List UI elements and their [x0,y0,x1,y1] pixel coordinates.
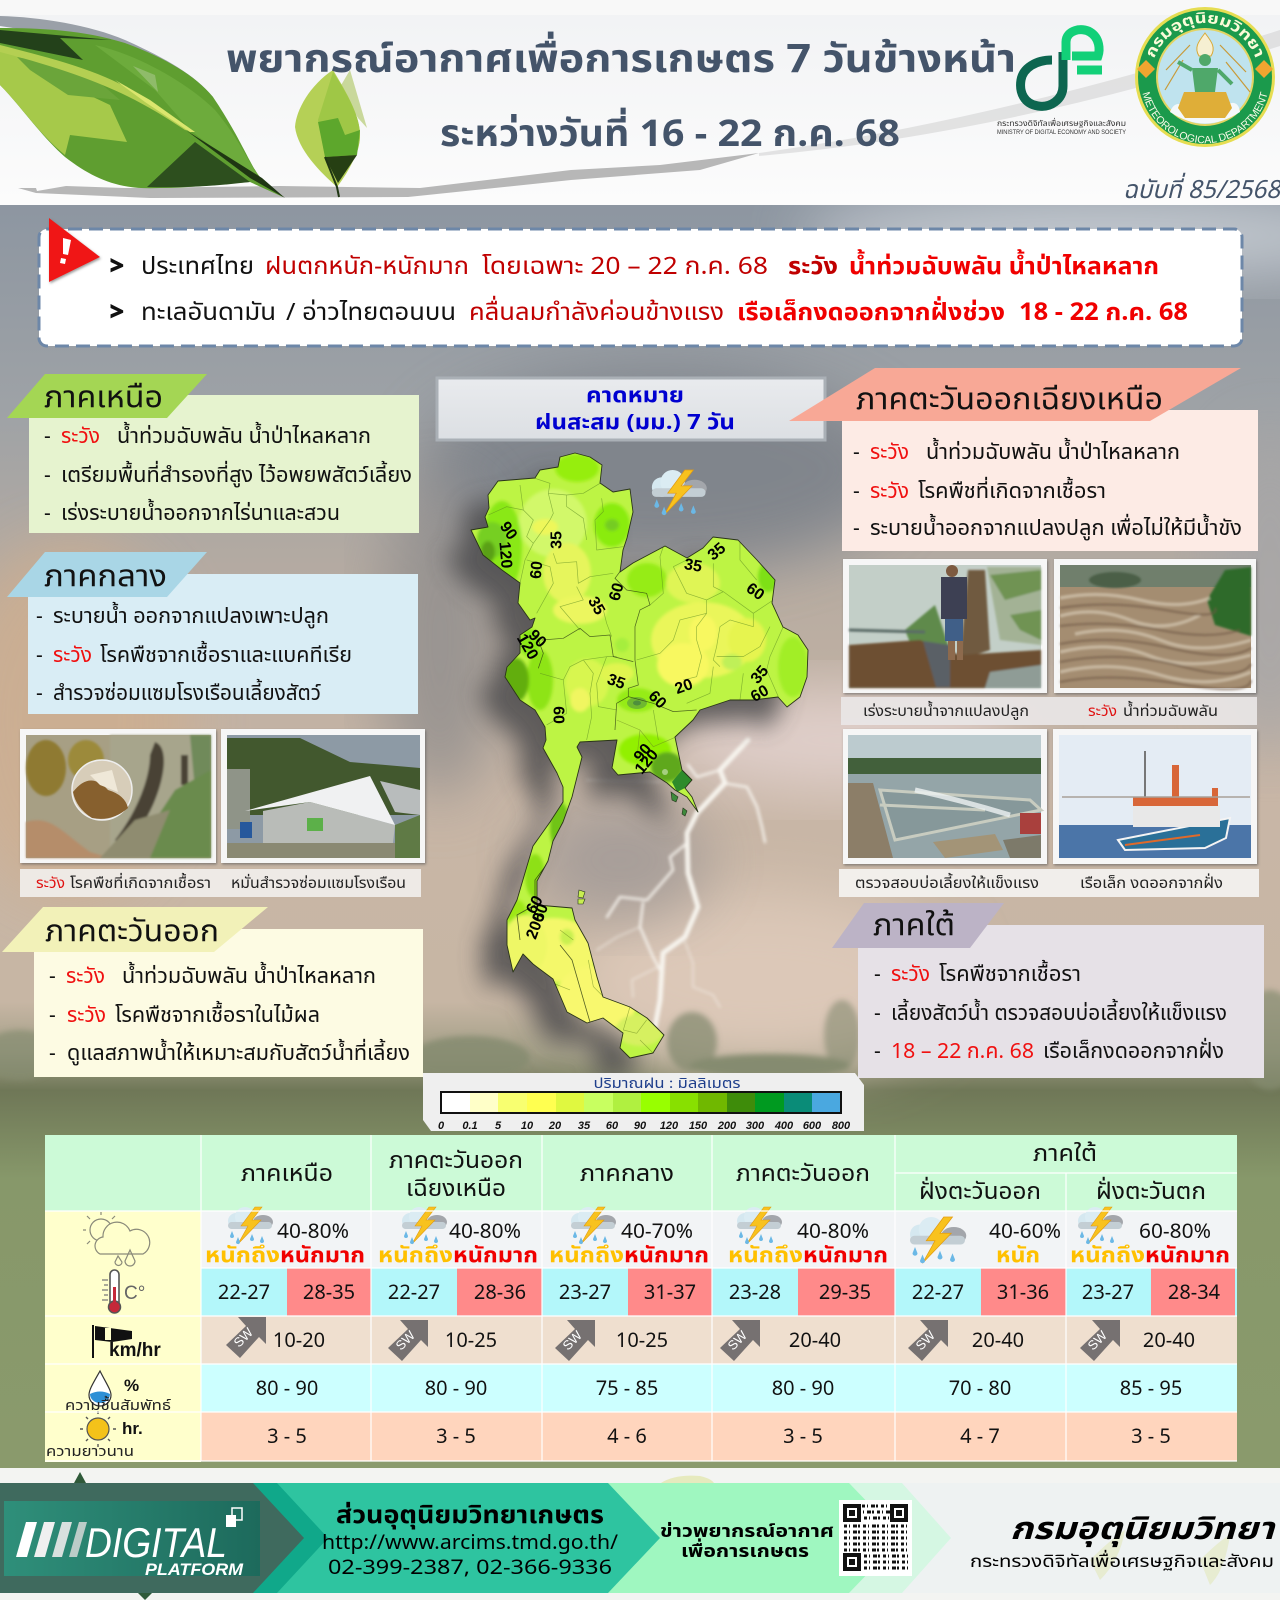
logo: ministry of digital economy: MINISTRY OF DIGITAL ECONOMY AND SOCIETY [997,130,1126,136]
wind row [201,1316,1237,1364]
alert line 2: 18 - 22 ก.ค. 68 [1019,295,1188,331]
header band [0,0,1280,210]
icon: sunshine duration: hr. [122,1419,143,1438]
rainfall contour labels: 60 [550,706,566,724]
caption band: central photos [20,869,421,897]
caption band: central photos: โรคพืชที่เกิดจากเชื้อรา [70,872,211,895]
caption band: central photos: ระวัง [36,872,65,895]
rainfall contour labels: 60 [743,580,767,604]
rainfall contour labels: 90 [631,741,655,765]
wind row: 20-40 [972,1326,1024,1356]
rain probability row: หนักถึง [378,1241,453,1272]
icon: sunshine duration [46,1411,143,1463]
rain probability row: 40-60% [989,1217,1061,1247]
province borders [488,478,783,740]
rainfall contour labels [495,519,772,941]
temperature row [201,1268,1237,1316]
rainfall contour labels: 60 [523,893,547,917]
alert line 1: โดยเฉพาะ 20 – 22 ก.ค. 68 [482,249,768,285]
alert line 1: ฝนตกหนัก-หนักมาก [265,249,469,285]
table header row: ฝั่งตะวันออก [919,1176,1041,1210]
photo: farmer draining field [843,559,1047,693]
logo: ministry of digital economy [997,30,1126,136]
central advice list: ระบายน้ำ ออกจากแปลงเพาะปลูก [53,601,329,633]
temperature row: 28-34 [1168,1278,1221,1308]
east advice list: ระวัง [67,1001,106,1032]
table header row: ภาคตะวันออก [389,1145,523,1179]
legend scale labels: 5 [495,1120,502,1132]
contact: agrometeorological division: http://www.arcims.tmd.go.th/ [322,1528,619,1558]
sunshine duration row: 3 - 5 [267,1422,307,1452]
central advice list: - [36,641,43,672]
map title box: คาดหมาย [586,381,684,412]
northeast advice list: - [853,477,860,508]
temperature row: 28-35 [303,1278,355,1308]
central advice list: - [36,679,43,710]
rain probability row: หนักมาก [453,1241,538,1272]
relative humidity row: 80 - 90 [425,1374,487,1404]
temperature row: 22-27 [912,1278,964,1308]
logo: meteorological department seal [1135,7,1275,147]
north advice list: - [44,461,51,492]
digital platform logo: PLATFORM [145,1560,244,1579]
central advice list [36,601,352,710]
temperature row: 23-28 [729,1278,781,1308]
contact: agrometeorological division [322,1497,619,1583]
temperature row: 23-27 [559,1278,611,1308]
rain probability row: หนัก [996,1241,1040,1272]
north advice list: เร่งระบายน้ำออกจากไร่นาและสวน [61,498,340,530]
icon: humidity: ความชื้นสัมพัทธ์ [65,1395,171,1417]
wind row: 10-20 [273,1326,325,1356]
rainfall contour labels: 35 [748,663,772,687]
east advice list: ดูแลสภาพน้ำให้เหมาะสมกับสัตว์น้ำที่เลี้ยง [67,1038,410,1070]
legend scale labels: 150 [689,1120,708,1132]
department name: กรมอุตุนิยมวิทยา [1010,1506,1276,1553]
panel: central region [7,552,418,714]
table header row: ภาคเหนือ [241,1158,333,1192]
title: พยากรณ์อากาศเพื่อการเกษตร 7 วันข้างหน้า [226,31,1016,90]
icon: thermometer [102,1270,145,1313]
east advice list: น้ำท่วมฉับพลัน น้ำป่าไหลหลาก [122,961,376,993]
panel: east region [2,907,423,1077]
rainfall contour labels: 60 [748,682,772,706]
rainfall contour labels: 90 [496,519,520,543]
photo: durian fungal disease [20,729,216,863]
east advice list [49,961,410,1070]
relative humidity row: 75 - 85 [596,1374,658,1404]
table header row: ภาคตะวันออก [736,1158,870,1192]
rainfall contour labels: 35 [705,540,729,564]
south advice list: - [874,960,881,991]
rain probability row: หนักมาก [803,1241,888,1272]
legend colour bar [441,1092,841,1113]
rainfall contour labels: 60 [528,560,546,580]
central advice list: - [36,602,43,633]
caption band: central photos: หมั่นสำรวจซ่อมแซมโรงเรือน [231,872,406,895]
photo: poultry house [221,729,425,863]
icon: small leaf [295,70,367,197]
logo: meteorological department seal: กรมอุตุนิยมวิทยา [1148,12,1262,58]
rainfall contour labels: 90 [525,627,549,651]
east advice list: โรคพืชจากเชื้อราในไม้ผล [115,1000,320,1032]
rainfall contour labels: 120 [632,746,662,778]
legend scale labels [438,1120,851,1132]
rain probability row: 40-70% [621,1217,693,1247]
rain probability row: หนักถึง [549,1241,624,1272]
heading: east [2,907,268,955]
icon: weather outline [83,1212,150,1266]
north advice list: ระวัง [61,422,100,453]
northeast advice list: - [853,514,860,545]
icon: humidity [65,1371,171,1417]
icon: sunshine duration: ความยาวนาน [46,1442,134,1463]
footer band [0,1468,1280,1600]
south advice list: ระวัง [891,960,930,991]
caption band: northeast photos: น้ำท่วมฉับพลัน [1123,700,1218,723]
relative humidity row: 80 - 90 [256,1374,318,1404]
rainfall contour labels: 120 [495,541,515,569]
heading: north: ภาคเหนือ [44,375,163,421]
northeast advice list: โรคพืชที่เกิดจากเชื้อรา [918,476,1106,508]
icon: humidity: % [124,1376,139,1395]
south advice list: เรือเล็กงดออกจากฝั่ง [1043,1037,1224,1068]
east advice list: - [49,1039,56,1070]
icon: storm cloud [652,470,707,515]
legend scale labels: 60 [606,1120,619,1132]
wind row: 20-40 [789,1326,841,1356]
legend scale labels: 300 [746,1120,765,1132]
legend scale labels: 120 [660,1120,679,1132]
heading: northeast: ภาคตะวันออกเฉียงเหนือ [856,377,1163,423]
central advice list: ระวัง [53,641,92,672]
wind row: 20-40 [1143,1326,1195,1356]
panel: south region [832,903,1264,1078]
central advice list: โรคพืชจากเชื้อราและแบคทีเรีย [100,640,352,672]
temperature row: 28-36 [474,1278,526,1308]
relative humidity row: 70 - 80 [949,1374,1011,1404]
alert line 2: > [110,295,124,331]
rainfall contour labels: 35 [605,671,627,693]
icon: thermometer: C° [124,1283,145,1304]
northeast advice list [853,437,1242,545]
legend scale labels: 800 [832,1120,851,1132]
south advice list: เลี้ยงสัตว์น้ำ ตรวจสอบบ่อเลี้ยงให้แข็งแรง [891,998,1227,1030]
rain probability row [201,1207,1237,1272]
sunshine duration row: 3 - 5 [1131,1422,1171,1452]
forecast table [45,1135,1237,1463]
wind row: 10-25 [445,1326,497,1356]
alert panel [39,218,1242,346]
QR caption [660,1519,834,1566]
contact: agrometeorological division: 02-399-2387, 02-366-9336 [328,1553,612,1583]
rainfall contour labels: 60 [606,581,628,603]
logo: ministry of digital economy: กระทรวงดิจิทัลเพื่อเศรษฐกิจและสังคม [997,117,1126,130]
alert line 2: เรือเล็กงดออกจากฝั่งช่วง [737,295,1005,331]
rainfall colour legend: ปริมาณฝน : มิลลิเมตร [594,1074,741,1095]
table header row: เฉียงเหนือ [406,1173,506,1207]
south advice list: - [874,999,881,1030]
south advice list: 18 – 22 ก.ค. 68 [891,1037,1034,1068]
northeast advice list: - [853,438,860,469]
legend scale labels: 400 [774,1120,794,1132]
legend scale labels: 600 [803,1120,822,1132]
table header row: ภาคใต้ [1033,1138,1097,1172]
legend scale labels: 90 [634,1120,647,1132]
map title box: ฝนสะสม (มม.) 7 วัน [535,408,735,439]
northeast advice list: น้ำท่วมฉับพลัน น้ำป่าไหลหลาก [926,437,1180,469]
caption band: northeast photos [841,697,1257,725]
map title box [437,378,825,440]
table header row: ภาคกลาง [580,1158,674,1192]
rainfall contour labels: 20 [673,676,695,698]
east advice list: - [49,1001,56,1032]
rain probability row: 40-80% [277,1217,349,1247]
rainfall contour labels: 120 [513,631,541,663]
temperature row: 29-35 [819,1278,871,1308]
rain probability row: หนักมาก [280,1241,365,1272]
alert line 1: ประเทศไทย [141,249,254,285]
icon: windsock km/hr: km/hr [109,1340,161,1361]
panel: north region [7,374,419,533]
alert line 2: คลื่นลมกำลังค่อนข้างแรง [469,295,724,331]
legend scale labels: 20 [548,1120,562,1132]
caption band: northeast photos: ระวัง [1088,700,1117,723]
legend scale labels: 0 [438,1120,445,1132]
heading: south: ภาคใต้ [873,903,955,949]
temperature row: 22-27 [218,1278,270,1308]
subtitle: date range: ระหว่างวันที่ 16 - 22 ก.ค. 68 [440,107,900,163]
northeast advice list: ระวัง [870,438,909,469]
sunshine duration row: 3 - 5 [436,1422,476,1452]
alert line 2 [110,295,1188,331]
legend scale labels: 200 [717,1120,737,1132]
relative humidity row [201,1364,1237,1412]
temperature row: 31-36 [997,1278,1049,1308]
trees on the horizon [0,990,1280,1090]
table header row [45,1135,1237,1211]
legend scale labels: 10 [521,1120,534,1132]
alert line 1: น้ำท่วมฉับพลัน น้ำป่าไหลหลาก [849,249,1159,285]
relative humidity row: 80 - 90 [772,1374,834,1404]
heading: northeast [789,368,1241,423]
rainfall contour labels: 50 [530,902,552,924]
north advice list: น้ำท่วมฉับพลัน น้ำป่าไหลหลาก [117,421,371,453]
icon: big leaf [0,16,285,198]
map: Thailand 7-day accumulated rainfall [446,440,820,1080]
heading: central: ภาคกลาง [44,554,167,600]
sunshine duration row: 4 - 6 [607,1422,647,1452]
rainfall contour labels: 35 [683,556,703,576]
icon: warning triangle [49,218,100,282]
alert line 2: / อ่าวไทยตอนบน [286,295,456,331]
north advice list: - [44,422,51,453]
sunshine duration row: 4 - 7 [960,1422,1000,1452]
relative humidity row: 85 - 95 [1120,1374,1182,1404]
QR code [839,1500,912,1576]
rain probability row: หนักถึง [205,1241,280,1272]
temperature row: 23-27 [1082,1278,1134,1308]
rain probability row: หนักถึง [728,1241,803,1272]
alert line 2: ทะเลอันดามัน [141,295,276,331]
alert line 1: ระวัง [788,249,838,285]
row labels column [45,1211,201,1463]
rainfall contour labels: 60 [645,688,669,712]
heading: south [832,903,1004,949]
rain probability row: 40-80% [797,1217,869,1247]
wind row: 10-25 [616,1326,668,1356]
legend scale labels: 35 [578,1120,591,1132]
caption band: east and south photos [839,869,1259,897]
east advice list: - [49,962,56,993]
temperature row: 31-37 [644,1278,696,1308]
QR caption: ข่าวพยากรณ์อากาศ [660,1519,834,1546]
table header row: ฝั่งตะวันตก [1096,1176,1206,1210]
north advice list: เตรียมพื้นที่สำรองที่สูง ไว้อพยพสัตว์เลี้ยง [61,460,412,492]
logo: meteorological department seal: METEOROLOGICAL DEPARTMENT [1142,92,1267,144]
northeast advice list: ระวัง [870,477,909,508]
rainfall colour legend [423,1073,864,1132]
QR caption: เพื่อการเกษตร [681,1538,809,1566]
rain probability row: 60-80% [1139,1217,1211,1247]
sunshine duration row: 3 - 5 [783,1422,823,1452]
heading: central [7,552,207,600]
south advice list: - [874,1037,881,1068]
sunshine duration row [201,1412,1237,1461]
north advice list [44,421,412,530]
rain probability row: 40-80% [449,1217,521,1247]
northeast advice list: ระบายน้ำออกจากแปลงปลูก เพื่อไม่ให้มีน้ำขัง [870,513,1242,545]
department name: กระทรวงดิจิทัลเพื่อเศรษฐกิจและสังคม [970,1549,1274,1575]
photo: fishing boat [1053,729,1257,864]
photo: aquaculture ponds [843,729,1047,864]
legend scale labels: 0.1 [462,1120,478,1132]
rainfall contour labels: 35 [548,531,566,549]
panel: northeast region [789,368,1258,551]
heading: east: ภาคตะวันออก [45,909,219,955]
contact: agrometeorological division: ส่วนอุตุนิยมวิทยาเกษตร [336,1497,604,1535]
caption band: east and south photos: ตรวจสอบบ่อเลี้ยงให้แข็งแรง [855,872,1039,895]
caption band: east and south photos: เรือเล็ก งดออกจากฝั่ง [1080,872,1223,895]
rain probability row: หนักมาก [624,1241,709,1272]
caption band: northeast photos: เร่งระบายน้ำจากแปลงปลูก [863,700,1029,723]
north advice list: - [44,499,51,530]
rainfall contour labels: 200 [523,910,549,941]
lightning bolt background [587,740,765,1027]
south advice list: โรคพืชจากเชื้อรา [939,959,1081,991]
swoosh shadow [18,153,759,198]
rain probability row: หนักถึง [1070,1241,1145,1272]
alert line 1 [110,249,1159,285]
digital platform logo [4,1501,260,1579]
temperature row: 22-27 [388,1278,440,1308]
south advice list [874,959,1227,1068]
rain probability row: หนักมาก [1145,1241,1230,1272]
icon: windsock km/hr [93,1325,161,1361]
photo: flash flood [1054,559,1256,693]
alert line 1: > [110,249,124,285]
rainfall contour labels: 35 [584,594,608,618]
digital platform logo: DIGITAL [85,1519,227,1566]
heading: north [7,374,207,421]
east advice list: ระวัง [66,962,105,993]
department name [970,1506,1276,1575]
central advice list: สำรวจซ่อมแซมโรงเรือนเลี้ยงสัตว์ [53,678,321,710]
